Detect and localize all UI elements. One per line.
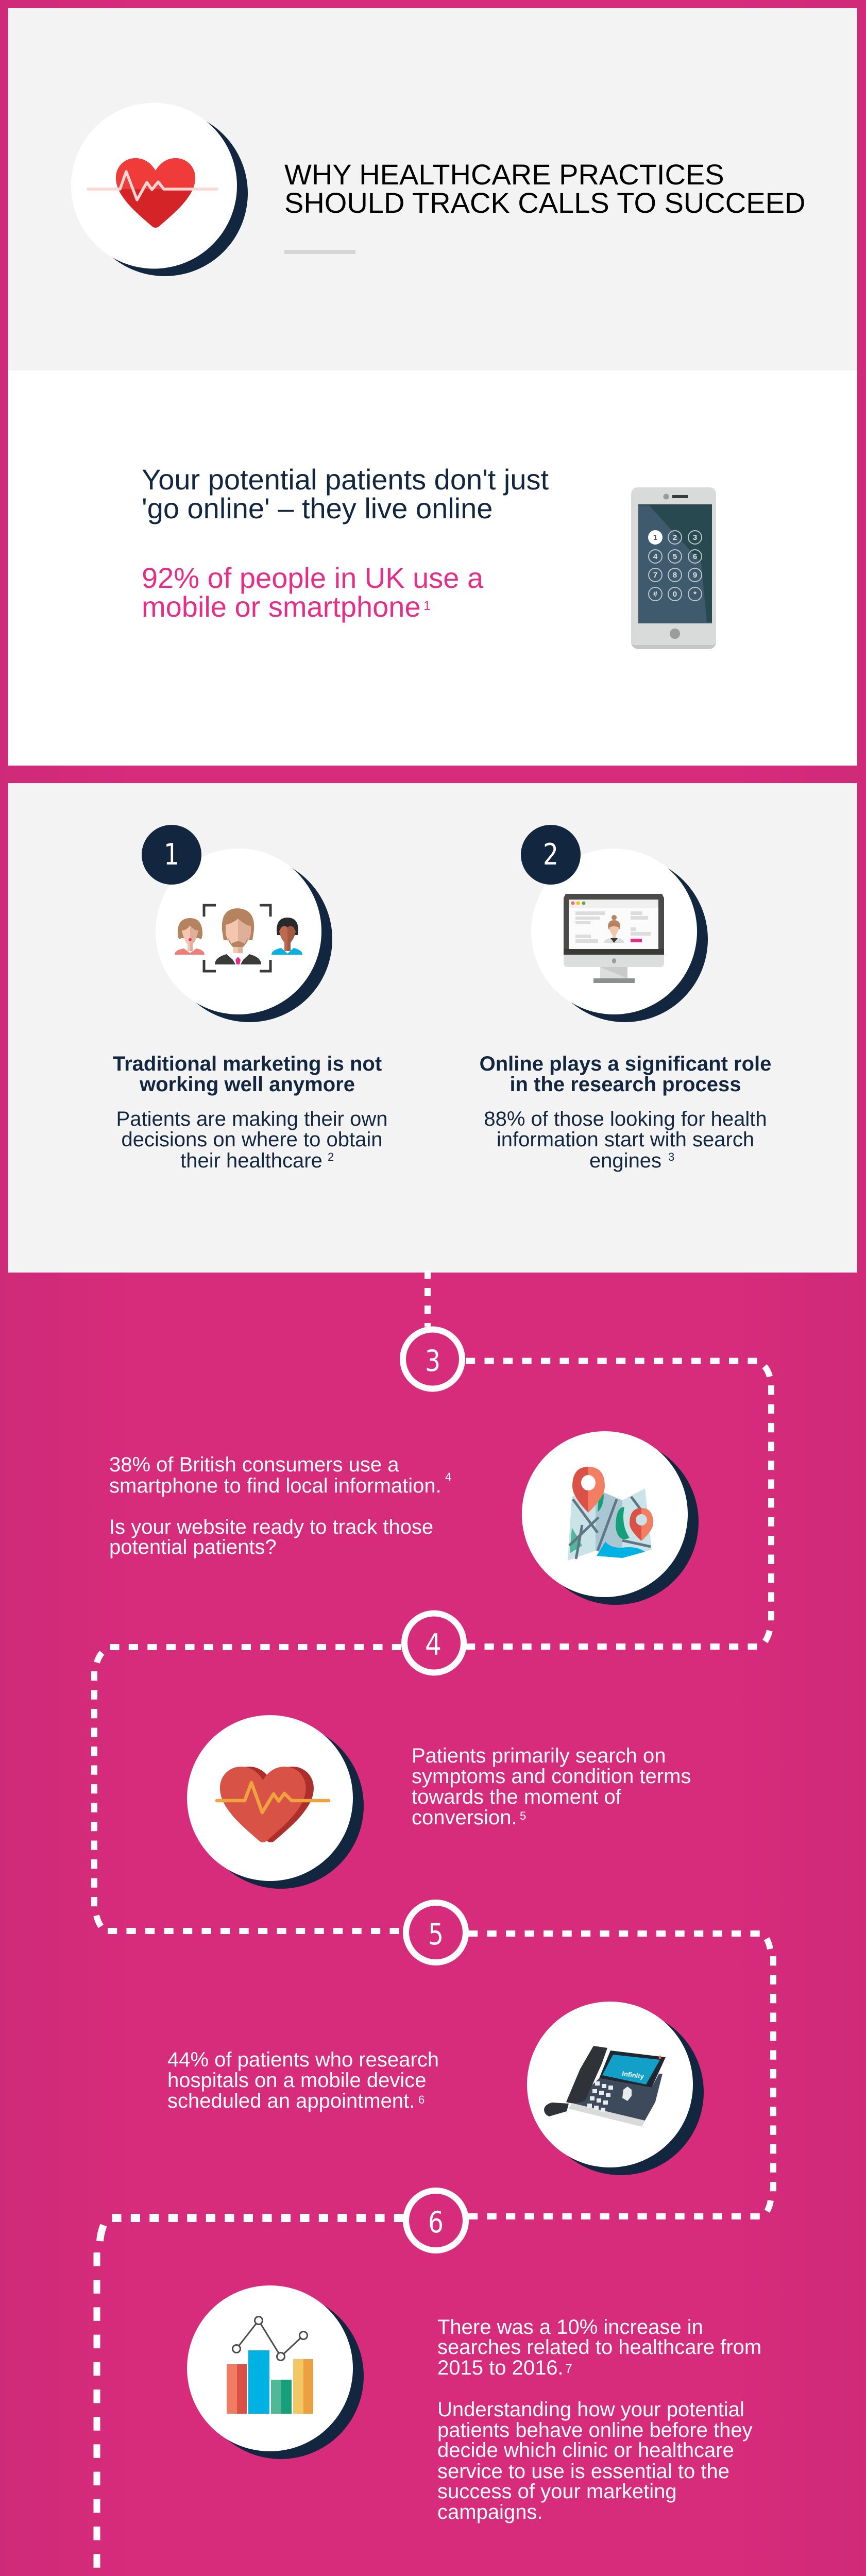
step 4 number ring: 4: [425, 1628, 442, 1662]
step 6 text: searches related to healthcare from: [437, 2336, 761, 2359]
step 6 text: service to use is essential to the: [437, 2460, 729, 2483]
step 6 text: 2015 to 2016.: [437, 2357, 564, 2379]
step 2 text: [484, 1108, 767, 1172]
step 6 text: There was a 10% increase in: [437, 2316, 703, 2338]
step 2 text: engines: [589, 1149, 661, 1172]
mobile statistic: mobile or smartphone: [142, 590, 421, 623]
icon: smartphone: 3: [693, 533, 697, 542]
icon: heart in circle: [71, 103, 248, 276]
step 2 text: information start with search: [497, 1128, 754, 1151]
step 3 number ring: 3: [425, 1344, 440, 1378]
step 4 text: conversion.: [412, 1806, 517, 1829]
icon: smartphone: 6: [693, 552, 697, 561]
step 6 text: [437, 2316, 761, 2523]
step 6 number ring: 6: [428, 2206, 444, 2240]
step 3 icon: map with pins: [522, 1431, 699, 1605]
step 6 text: campaigns.: [437, 2501, 543, 2523]
step 5 text: scheduled an appointment.: [167, 2090, 415, 2112]
step 5 icon: desk phone: Infinity: [622, 2070, 645, 2080]
step 6 text: Understanding how your potential: [437, 2398, 744, 2421]
title: WHY HEALTHCARE PRACTICES: [284, 158, 724, 191]
step 1 number badge: [142, 825, 201, 885]
mobile statistic: 92% of people in UK use a: [142, 562, 484, 594]
step 2 number badge: [521, 825, 581, 885]
step 5 text: 6: [418, 2093, 424, 2106]
icon: smartphone: #: [653, 590, 658, 599]
icon: smartphone: 7: [653, 571, 657, 580]
step 2 heading: Online plays a significant role: [480, 1053, 771, 1075]
icon: smartphone: 9: [693, 571, 697, 580]
step 4 text: 5: [520, 1809, 526, 1822]
step 1 text: Patients are making their own: [116, 1108, 387, 1130]
step 3 text: Is your website ready to track those: [109, 1516, 433, 1538]
mobile statistic: [142, 562, 484, 623]
icon: smartphone: 5: [673, 552, 677, 561]
icon: smartphone: 8: [673, 571, 677, 580]
step 3 text: [109, 1453, 451, 1558]
step 5 number ring: 5: [428, 1918, 444, 1952]
step 1 number badge: 1: [164, 838, 179, 872]
title: [284, 158, 805, 219]
step 6 text: 7: [565, 2362, 572, 2376]
step 1 heading: [113, 1053, 382, 1096]
panel: header: [8, 8, 857, 370]
step 4 text: Patients primarily search on: [412, 1744, 666, 1767]
step 3 text: 4: [445, 1470, 451, 1483]
panel: steps one and two: [8, 783, 857, 1273]
step 4 text: towards the moment of: [412, 1786, 622, 1808]
step 3 text: 38% of British consumers use a: [109, 1453, 399, 1476]
step 5 number ring: [406, 1903, 466, 1962]
step 3 number ring: [403, 1329, 462, 1389]
icon: smartphone: [631, 487, 716, 649]
title underline: [284, 250, 355, 254]
step 2 icon: monitor in circle: [531, 849, 708, 1022]
step 2 number badge: 2: [543, 838, 558, 872]
title: SHOULD TRACK CALLS TO SUCCEED: [284, 187, 805, 219]
step 6 text: decide which clinic or healthcare: [437, 2439, 734, 2462]
step 6 number ring: [406, 2191, 466, 2250]
step 4 text: symptoms and condition terms: [412, 1765, 691, 1788]
intro statement: [142, 463, 549, 524]
icon: smartphone: 1: [653, 533, 657, 542]
step 5 text: [167, 2048, 439, 2112]
step 6 icon: bar and line chart: [187, 2285, 364, 2459]
step 2 text: 88% of those looking for health: [484, 1108, 767, 1130]
step 2 text: 3: [668, 1150, 674, 1163]
intro statement: Your potential patients don't just: [142, 463, 549, 496]
step 1 heading: working well anymore: [139, 1073, 355, 1096]
icon: smartphone: 4: [653, 552, 658, 561]
step 2 heading: in the research process: [510, 1073, 741, 1096]
icon: smartphone: *: [693, 590, 697, 599]
step 4 number ring: [404, 1614, 464, 1672]
step 1 text: decisions on where to obtain: [122, 1128, 382, 1151]
step 5 icon: desk phone: [527, 2002, 704, 2175]
panel: mobile intro: [8, 370, 857, 766]
icon: smartphone: 0: [673, 590, 677, 599]
step 1 text: [116, 1108, 387, 1172]
step 1 heading: Traditional marketing is not: [113, 1053, 382, 1075]
intro statement: 'go online' – they live online: [142, 492, 493, 524]
step 5 text: 44% of patients who research: [167, 2048, 439, 2071]
mobile statistic: 1: [423, 599, 431, 613]
step 1 icon: people in circle: [156, 849, 332, 1022]
step 6 text: success of your marketing: [437, 2480, 677, 2503]
step 5 text: hospitals on a mobile device: [167, 2069, 427, 2092]
step 3 text: smartphone to find local information.: [109, 1475, 442, 1497]
step 4 text: [412, 1744, 691, 1829]
icon: smartphone: 2: [673, 533, 677, 542]
step 1 text: 2: [328, 1150, 334, 1163]
step 6 text: patients behave online before they: [437, 2419, 753, 2442]
step 4 icon: heart with pulse: [187, 1715, 364, 1889]
step 1 text: their healthcare: [180, 1149, 322, 1172]
dashed connector path: [94, 1270, 773, 2571]
step 2 heading: [480, 1053, 771, 1096]
step 3 text: potential patients?: [109, 1536, 277, 1558]
